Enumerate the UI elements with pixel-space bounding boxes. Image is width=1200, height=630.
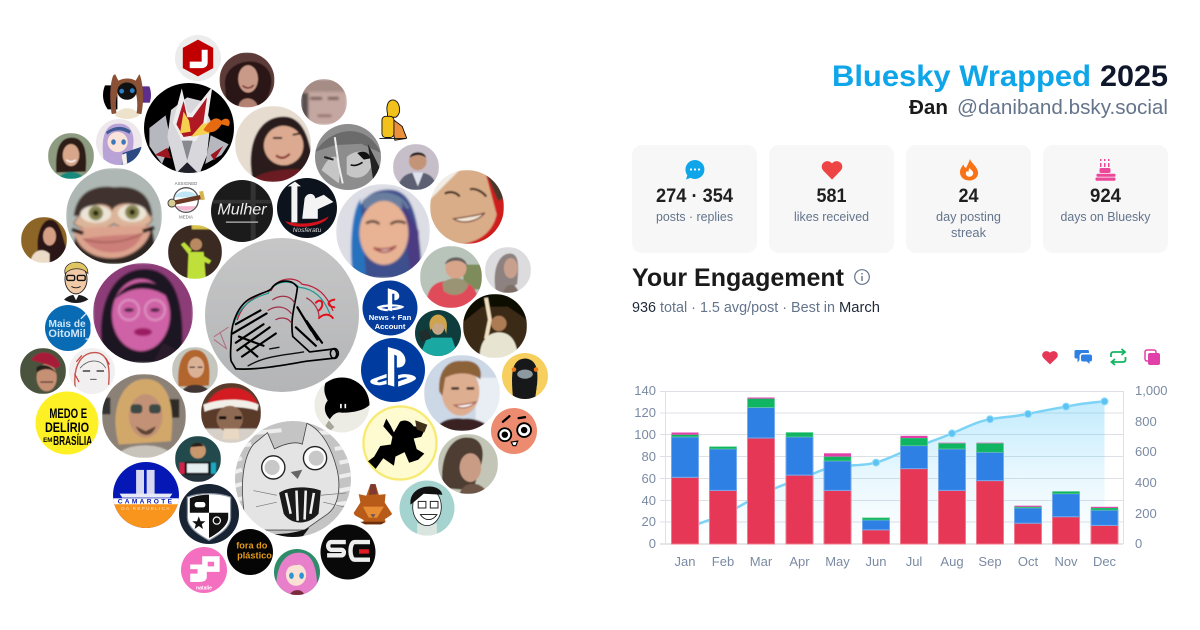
avatar: PlayStation News + Fan Account: Account [375, 322, 406, 331]
avatar: gremlin with Santa hat [201, 383, 261, 443]
panel: days on Bluesky stat: days on Bluesky [1060, 209, 1151, 224]
avatar: gaming shield crest [179, 484, 239, 544]
stacked bars: quotes [672, 398, 1118, 508]
month labels: Jul [906, 554, 922, 569]
avatar: Mais de Oito Mil logo: OitoMil [48, 328, 86, 340]
stacked bars: reposts [672, 399, 1118, 520]
avatar: smiling young man [424, 355, 500, 431]
avatar: Camarote da República [113, 462, 179, 528]
avatar: red J logo [175, 35, 221, 81]
panel: days on Bluesky stat [1043, 145, 1168, 253]
panel: posts and replies stat [632, 145, 757, 253]
avatar: Luffy silhouette [362, 405, 438, 481]
left axis labels: 0 [649, 536, 656, 551]
avatar: woman curly hair [220, 52, 274, 108]
avatar: nosferatu silhouette logo: Nosferatu [293, 227, 322, 234]
avatar: Mulher logo: Mulher [217, 201, 267, 219]
month labels: Nov [1054, 554, 1078, 569]
right axis labels: 800 [1135, 414, 1157, 429]
month labels: Apr [789, 554, 810, 569]
right axis labels [1135, 383, 1168, 551]
stacked bars: likes [672, 438, 1118, 544]
avatar: PlayStation News + Fan Account [362, 280, 418, 336]
left axis labels [634, 383, 656, 551]
avatar: Medo e Delírio em Brasília: MEDO E [49, 405, 87, 421]
panel: day posting streak stat: streak [951, 225, 986, 240]
avatar: Camarote da República: DA REPÚBLICA [121, 505, 171, 511]
avatar: woman wavy hair [438, 434, 498, 494]
month labels: Mar [750, 554, 773, 569]
avatar: SE logo [320, 524, 376, 580]
text: engagement summary: total · 1.5 avg/post · Best in [660, 300, 835, 316]
panel: posts and replies stat: posts · replies [656, 209, 733, 224]
month labels: Aug [940, 554, 964, 569]
icon: heart [822, 162, 842, 179]
avatar: Mais de Oito Mil logo [45, 305, 91, 351]
month labels: Feb [712, 554, 734, 569]
panel: day posting streak stat: day posting [936, 209, 1001, 224]
panel: likes received stat: likes received [794, 209, 869, 224]
left axis labels: 140 [634, 383, 656, 398]
avatar: angry cat manga [235, 421, 351, 537]
panel: days on Bluesky stat: 924 [1090, 186, 1121, 207]
icon: replies bubbles [1074, 350, 1092, 364]
avatar: cartoon glasses on teal [400, 480, 454, 536]
icon: likes heart [1042, 351, 1058, 364]
avatar: woman left small [21, 217, 67, 263]
icon: birthday cake [1096, 159, 1116, 181]
month labels: Oct [1018, 554, 1038, 569]
avatar: natalie pink logo: natalie [196, 585, 212, 591]
avatar: blurred face [301, 79, 347, 125]
text: engagement summary: March [839, 300, 880, 316]
avatar: woman selfie dark hair [235, 106, 311, 182]
avatar: man with Switch console [175, 436, 221, 482]
cumulative area [685, 401, 1104, 544]
avatar: Mais de Oito Mil logo: Mais de [49, 319, 86, 330]
left axis labels: 80 [642, 449, 656, 464]
icon: info [855, 270, 869, 284]
header: title: 2025 [1100, 60, 1168, 93]
right axis labels: 0 [1135, 536, 1142, 551]
header: title: Bluesky Wrapped [832, 60, 1091, 93]
icon: chat bubble [685, 160, 704, 180]
avatar: woman with cap [420, 246, 482, 308]
month labels: Jun [866, 554, 886, 569]
avatar: Camarote da República: CAMAROTE [118, 499, 174, 506]
avatar: Assigned Media logo: MEDIA [179, 214, 193, 219]
avatar: woman magenta glasses [93, 263, 193, 363]
right axis labels: 200 [1135, 506, 1157, 521]
avatar: nosferatu silhouette logo [277, 178, 337, 238]
avatar: Medo e Delírio em Brasília: EM [43, 437, 53, 444]
icon: quote copies [1145, 350, 1160, 365]
chart: monthly engagement [634, 383, 1168, 569]
avatar: central sketch [205, 238, 359, 392]
right axis labels: 600 [1135, 444, 1157, 459]
left axis labels: 100 [634, 427, 656, 442]
avatar: yellow backpack cartoon [379, 100, 408, 141]
right axis labels: 400 [1135, 475, 1157, 490]
panel: day posting streak stat: 24 [958, 186, 979, 207]
avatar: armored mask hero [144, 83, 234, 173]
avatar: cartoon man with glasses [64, 262, 88, 303]
avatar: Medo e Delírio em Brasília [36, 392, 98, 454]
avatar: distorted face filter [66, 168, 162, 264]
chart grid [660, 391, 1124, 544]
avatar: smiling man close-up [430, 170, 504, 244]
avatar: PlayStation logo [361, 338, 425, 402]
heading: Your Engagement: Your Engagement [632, 264, 845, 292]
header: user name and handle: Đan [909, 97, 948, 119]
avatar: Medo e Delírio em Brasília: DELÍRIO [45, 419, 89, 435]
avatar: PlayStation News + Fan Account: News + Fan [369, 313, 412, 322]
panel: likes received stat [769, 145, 894, 253]
month labels: May [825, 554, 850, 569]
avatar: black and white manga [315, 124, 381, 190]
avatar: emu on yellow [502, 353, 548, 399]
avatar: Assigned Media logo [168, 182, 205, 218]
avatar: man in yellow shirt [168, 225, 222, 279]
avatar: pink-haired anime [274, 549, 320, 595]
icon: repost arrows [1111, 349, 1126, 365]
month labels: Sep [978, 554, 1002, 569]
month labels [675, 554, 1117, 569]
left axis labels: 40 [642, 493, 656, 508]
left axis labels: 120 [634, 405, 656, 420]
avatar: Mulher logo [211, 180, 273, 242]
header: user name and handle: @daniband.bsky.social [957, 97, 1168, 119]
avatar: man with red cap [20, 348, 66, 394]
avatar: black blob [314, 378, 370, 432]
panel: posts and replies stat: 274 · 354 [656, 186, 733, 207]
icon: flame [960, 159, 978, 180]
stacked bars: replies [672, 407, 1118, 530]
left axis labels: 60 [642, 471, 656, 486]
left axis labels: 20 [642, 514, 656, 529]
avatar: Medo e Delírio em Brasília: BRASÍLIA [53, 433, 92, 448]
month labels: Dec [1093, 554, 1117, 569]
avatar: smiling woman with curls [48, 133, 94, 179]
avatar: fox Red XIII [354, 484, 392, 524]
avatar: fora do plástico: plástico [237, 550, 272, 560]
avatar: purple-haired anime elf [96, 119, 142, 165]
legend: chart series icons [1042, 349, 1160, 365]
avatar: natalie pink logo [181, 547, 227, 593]
month labels: Jan [675, 554, 695, 569]
right axis labels: 1,000 [1135, 383, 1168, 398]
avatar: Samus anime [415, 310, 461, 356]
avatar: older woman with grey hair [485, 247, 531, 293]
avatar: furry drawing [103, 71, 151, 119]
cumulative line [685, 398, 1108, 528]
avatar: red-haired woman with glasses [172, 347, 218, 393]
avatar: fora do plástico [227, 529, 273, 575]
avatar: fora do plástico: fora do [236, 540, 268, 550]
avatar: blond-haired man with glasses [102, 374, 186, 458]
avatar: sketched girl [69, 348, 115, 394]
panel: avatar bubble cluster [20, 35, 548, 595]
avatar: man with torch [463, 294, 527, 358]
avatar: man in suit [393, 144, 439, 190]
panel: day posting streak stat [906, 145, 1031, 253]
avatar: orange cartoon face [491, 408, 537, 454]
avatar: blue-haired woman [336, 184, 430, 278]
panel: likes received stat: 581 [816, 186, 847, 207]
avatar: Assigned Media logo: ASSIGNED [175, 181, 197, 186]
text: engagement summary: 936 [632, 300, 656, 316]
